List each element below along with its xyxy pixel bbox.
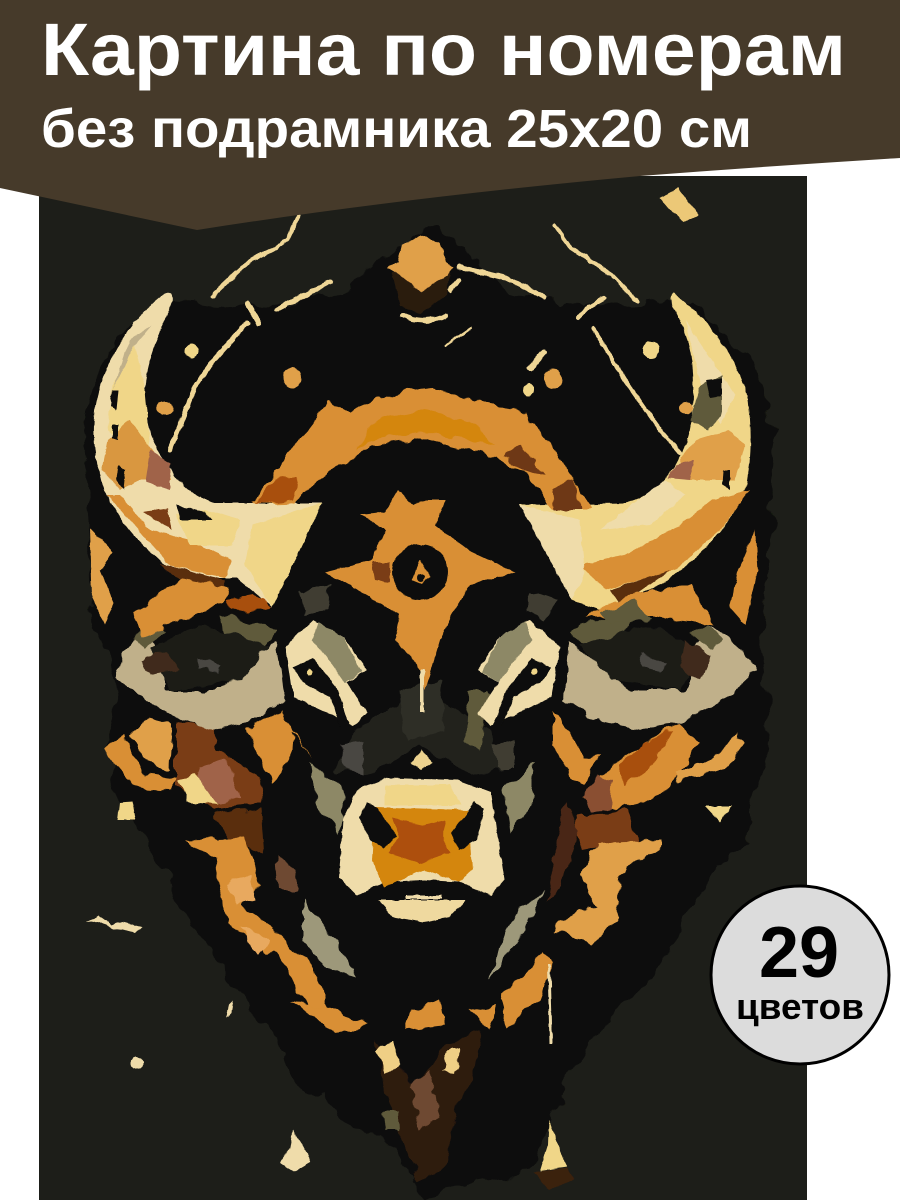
subtitle: без подрамника 25х20 см (41, 99, 752, 159)
badge label: цветов (736, 986, 864, 1027)
right ear (565, 610, 757, 730)
left face patch and eye (285, 620, 367, 727)
right fur with orange patches (500, 710, 745, 1027)
header banner (0, 0, 900, 230)
badge number: 29 (759, 913, 839, 993)
thin gold rings (170, 215, 680, 453)
lower neck dark column (375, 1000, 495, 1183)
muzzle (339, 778, 504, 922)
painting: bull illustration (84, 188, 775, 1200)
top ornament (388, 235, 454, 314)
left ear (115, 613, 285, 730)
right horn (520, 293, 751, 610)
nostrils (359, 802, 397, 848)
forehead and cheeks (300, 585, 558, 775)
cheek streaks (303, 763, 544, 980)
left fur with orange patches (102, 710, 366, 1033)
orange above ears (133, 580, 715, 637)
nose bridge marks (410, 670, 433, 770)
right drip (549, 965, 551, 1043)
left horn (94, 292, 322, 607)
title: Картина по номерам (41, 8, 846, 91)
black silhouette behind bull (84, 225, 775, 1200)
mouth (378, 900, 466, 922)
painting background panel (39, 176, 807, 1200)
gold spots and splashes (87, 188, 758, 1190)
forehead sun ornament (325, 490, 515, 690)
badge: colour count (711, 886, 889, 1064)
right face patch and eye (478, 620, 560, 727)
crown arc around head (252, 388, 593, 510)
